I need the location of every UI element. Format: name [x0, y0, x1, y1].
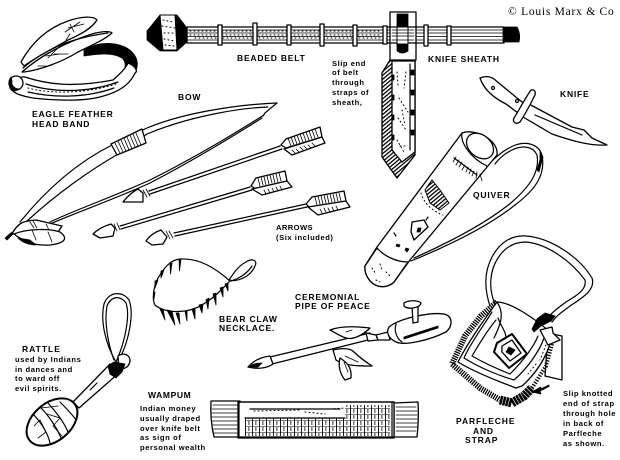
copyright: © Louis Marx & Co [508, 6, 614, 18]
label: knife sheath: KNIFE SHEATH [428, 54, 500, 64]
icon: beaded belt [147, 15, 520, 51]
note: rattle: in dances and [15, 365, 73, 374]
icon: wampum [211, 401, 418, 438]
label: rattle: RATTLE [22, 344, 61, 354]
label: parfleche and strap: PARFLECHE [456, 416, 515, 426]
note: slip end of belt: sheath, [332, 98, 362, 107]
icon: rattle [18, 294, 131, 455]
label: arrows: ARROWS [276, 223, 313, 232]
shell [9, 76, 23, 90]
label: bow: BOW [178, 92, 201, 102]
note: parfleche: as shown. [563, 439, 605, 448]
label: parfleche and strap: STRAP [465, 435, 498, 445]
label: knife: KNIFE [560, 89, 590, 99]
note: parfleche: end of strap [563, 399, 615, 408]
icon: pipe of peace [248, 301, 451, 380]
note: wampum [140, 404, 206, 452]
note: rattle: to ward off [15, 374, 60, 383]
note: slip end of belt: straps of [332, 88, 369, 97]
quiver mouth [461, 128, 499, 164]
note: parfleche: Slip knotted [563, 389, 613, 398]
note: slip end of belt: through [332, 78, 365, 87]
note: slip end of belt: Slip end [332, 59, 366, 68]
quiver decoration [425, 180, 449, 210]
note: parfleche: Parfleche [563, 429, 602, 438]
label: bear claw necklace [219, 314, 278, 333]
label: ceremonial pipe: PIPE OF PEACE [295, 301, 371, 311]
label: bear claw necklace: BEAR CLAW [219, 314, 278, 324]
note: slip end of belt: of belt [332, 68, 359, 77]
note: parfleche: in back of [563, 419, 604, 428]
note: rattle: evil spirits. [15, 384, 62, 393]
icon: arrow three [146, 191, 350, 245]
note: wampum: usually draped [140, 414, 201, 423]
icon: parfleche and strap [452, 236, 593, 403]
icon: arrow one [123, 127, 325, 202]
icon: eagle feather head band [9, 17, 137, 100]
icon: arrow two [93, 171, 292, 238]
label: quiver: QUIVER [473, 190, 510, 200]
note: slip end of belt [332, 59, 369, 107]
label: arrows: (Six included) [276, 233, 334, 242]
note: rattle: used by Indians [15, 355, 81, 364]
note: rattle [15, 355, 81, 393]
note: wampum: as sign of [140, 433, 181, 442]
bow feathers [12, 220, 62, 234]
label: bear claw necklace: NECKLACE. [219, 323, 275, 333]
label: head band: HEAD BAND [32, 119, 90, 129]
icon: bear claw necklace [153, 259, 256, 325]
feathers [21, 17, 97, 66]
label: parfleche and strap: AND [473, 426, 494, 436]
label: ceremonial pipe: CEREMONIAL [295, 292, 360, 302]
label: eagle feather: EAGLE FEATHER [32, 109, 114, 119]
icon: knife sheath [382, 12, 416, 178]
label: wampum: WAMPUM [148, 390, 191, 400]
bag fringe [452, 302, 497, 364]
pipe leaves [330, 327, 370, 339]
label: arrows [276, 223, 334, 242]
label: beaded belt: BEADED BELT [237, 53, 306, 63]
note: parfleche [563, 389, 616, 448]
note: wampum: Indian money [140, 404, 196, 413]
note: wampum: personal wealth [140, 443, 206, 452]
icon: bow [5, 103, 277, 245]
icon: knife [480, 77, 607, 145]
label: parfleche and strap [456, 416, 515, 445]
icon: quiver [365, 128, 543, 287]
note: wampum: over knife belt [140, 424, 200, 433]
label: ceremonial pipe [295, 292, 371, 311]
note: parfleche: through hole [563, 409, 616, 418]
